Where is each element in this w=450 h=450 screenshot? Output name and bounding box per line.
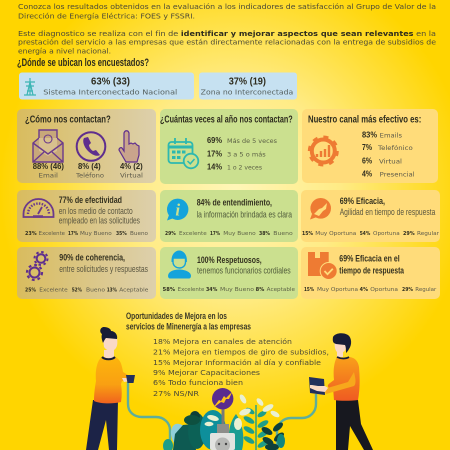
stat labels: 8% (4) [78, 162, 101, 171]
breakdown: Muy Bueno [80, 231, 112, 237]
heading: location: ¿Dónde se ubican los encuestados? [17, 57, 149, 69]
intro text: Dirección de Energía Eléctrica: FOES y FSSRI. [18, 12, 195, 20]
text: 84% de entendimiento, [197, 198, 272, 209]
breakdown: Muy Oportuna [315, 231, 356, 237]
breakdown: 38% [259, 231, 270, 237]
breakdown: Regular [417, 231, 439, 237]
panel: non-interconnected zone: Zona no Interconectada [201, 89, 293, 97]
icon: phone [77, 132, 105, 161]
breakdown: 29% [403, 231, 415, 237]
panel: efficacy response time [301, 247, 440, 299]
breakdown: Muy Bueno [220, 287, 254, 293]
intro text: Este diagnostico se realiza con el fin de identificar y mejorar aspectos que sean relevantes en la [18, 29, 436, 38]
breakdown: Excelente [178, 287, 204, 293]
breakdown: Regular [415, 287, 436, 293]
icon: pointing hand [119, 131, 139, 162]
panel: understanding [160, 190, 298, 242]
breakdown: 34% [206, 287, 217, 293]
panel: interconnected system: 63% (33) [91, 76, 130, 88]
breakdown: Muy Bueno [223, 231, 256, 237]
breakdown [165, 231, 293, 237]
text: 77% de efectividad [59, 195, 122, 206]
breakdown: Excelente [179, 231, 207, 237]
person: right [309, 333, 373, 450]
icon: gears [27, 252, 48, 280]
stats: 83% [362, 130, 377, 139]
breakdown: 29% [165, 231, 176, 237]
breakdown: 17% [68, 231, 78, 237]
icon: gear chart [309, 137, 337, 165]
breakdown: Excelente [39, 288, 68, 294]
heading: improvement opportunities [126, 311, 251, 332]
breakdown: 8% [256, 287, 264, 293]
person: left [86, 327, 135, 450]
stats: 4% [362, 170, 372, 179]
breakdown: 15% [302, 231, 313, 237]
breakdown: 35% [116, 231, 127, 237]
panel: coherence: entre solicitudes y respuestas [59, 264, 148, 275]
text: 90% de coherencia, [59, 253, 125, 264]
panel: interconnected system: Sistema Interconectado Nacional [43, 88, 177, 97]
panel: understanding: la información brindada es clara [197, 209, 293, 220]
panel: contacts per year: 1 o 2 veces [227, 164, 262, 171]
panel: most effective channel: Telefónico [377, 145, 413, 152]
breakdown: 15% [304, 287, 314, 293]
text: 100% Respetuosos, [197, 255, 262, 266]
icon: box check [308, 252, 337, 280]
panel: respect: tenemos funcionarios cordiales [197, 265, 291, 276]
improvement list: 27% NS/NR [153, 389, 199, 398]
intro text [18, 2, 436, 56]
breakdown: 4% [360, 287, 368, 293]
panel: efficacy agility [301, 190, 440, 242]
icon: info bubble: i [175, 200, 180, 220]
stats: 6% [362, 156, 372, 165]
foliage and plug [163, 393, 286, 450]
cables [128, 382, 316, 450]
breakdown [163, 287, 295, 293]
panel: contacts per year: Más de 5 veces [227, 138, 277, 145]
icon: calendar [168, 138, 198, 168]
panel: how they contact us: Email [38, 173, 58, 180]
breakdown: 23% [25, 231, 37, 237]
heading: improvement opportunities: servicios de Minenergía a las empresas [126, 322, 251, 332]
stats: 69% [207, 135, 222, 145]
icon: email [33, 130, 63, 162]
breakdown: 58% [163, 287, 175, 293]
panel: contacts per year [160, 109, 298, 184]
heading: ¿Cuántas veces al año nos contactan? [160, 113, 293, 125]
breakdown: Muy Oportuna [317, 287, 358, 293]
panel: how they contact us: Virtual [120, 173, 143, 180]
intro text: prestación del servicio a las empresas que están directamente relacionadas con la entrega de subsidios de [18, 38, 436, 46]
intro text: energía a nivel nacional. [18, 46, 111, 56]
text: 69% Eficacia en el [339, 254, 400, 265]
stat labels: 88% (46) [33, 162, 64, 171]
panel: interconnected system [19, 72, 194, 100]
panel: non-interconnected zone [199, 72, 297, 100]
breakdown: Bueno [130, 231, 148, 237]
panel: most effective channel: Emails [380, 132, 402, 139]
breakdown: 52% [72, 288, 82, 294]
breakdown: Aceptable [267, 287, 295, 293]
stats: 17% [207, 149, 222, 159]
breakdown [25, 231, 148, 237]
breakdown: Bueno [273, 231, 293, 237]
icon: energy bolt badge [212, 388, 233, 409]
stats [362, 130, 377, 179]
intro text: Conozca los resultados obtenidos en la evaluación a los indicadores de satisfacción al Grupo de Valor de la [18, 2, 436, 11]
breakdown: 25% [25, 288, 36, 294]
stats: 7% [362, 143, 372, 152]
breakdown: 17% [210, 231, 220, 237]
panel: most effective channel: Presencial [380, 172, 415, 179]
panel: most effective channel [302, 109, 438, 183]
icon: power tower [24, 78, 36, 95]
panel: respect [160, 247, 298, 299]
panel: effectiveness: en los medio de contacto [59, 206, 133, 217]
improvement list: 9% Mejorar Capacitaciones [153, 368, 260, 377]
icon: agent [168, 251, 191, 278]
stats: 14% [207, 161, 222, 171]
heading: ¿Cómo nos contactan? [25, 113, 111, 125]
icon: gauge [24, 199, 54, 217]
panel: coherence [17, 247, 156, 299]
breakdown: Aceptable [119, 288, 148, 294]
breakdown: Bueno [86, 288, 105, 294]
breakdown [304, 287, 436, 293]
breakdown: Excelente [39, 231, 65, 237]
improvement list: 21% Mejora en tiempos de giro de subsidios, [153, 348, 329, 356]
improvement list: 6% Todo funciona bien [153, 378, 243, 387]
panel: efficacy response time: tiempo de respuesta [339, 265, 405, 276]
panel: non-interconnected zone: 37% (19) [229, 76, 266, 88]
improvement list: 15% Mejorar Información al día y confiable [153, 358, 322, 367]
stat labels [33, 162, 143, 171]
breakdown [302, 231, 439, 237]
panel: contacts per year: 3 a 5 o más [227, 152, 266, 159]
breakdown [25, 288, 148, 294]
panel: how they contact us: Teléfono [75, 173, 104, 180]
breakdown: Oportuna [370, 287, 398, 293]
panel: effectiveness [17, 190, 156, 242]
panel: most effective channel: Virtual [379, 158, 402, 165]
breakdown: 13% [107, 288, 117, 294]
breakdown: 54% [360, 231, 370, 237]
stats [207, 135, 222, 171]
panel: effectiveness: empleado en las solicitudes [59, 216, 140, 226]
breakdown: Oportuna [373, 231, 400, 237]
heading: improvement opportunities: Oportunidades de Mejora en los [126, 311, 227, 321]
icon: rocket bubble [310, 198, 331, 220]
panel: how they contact us [17, 109, 156, 183]
breakdown: 29% [402, 287, 413, 293]
stat labels: 4% (2) [120, 162, 143, 171]
improvement list: 18% Mejora en canales de atención [153, 337, 292, 346]
improvement list [153, 337, 329, 398]
text: 69% Eficacia, [340, 196, 385, 207]
